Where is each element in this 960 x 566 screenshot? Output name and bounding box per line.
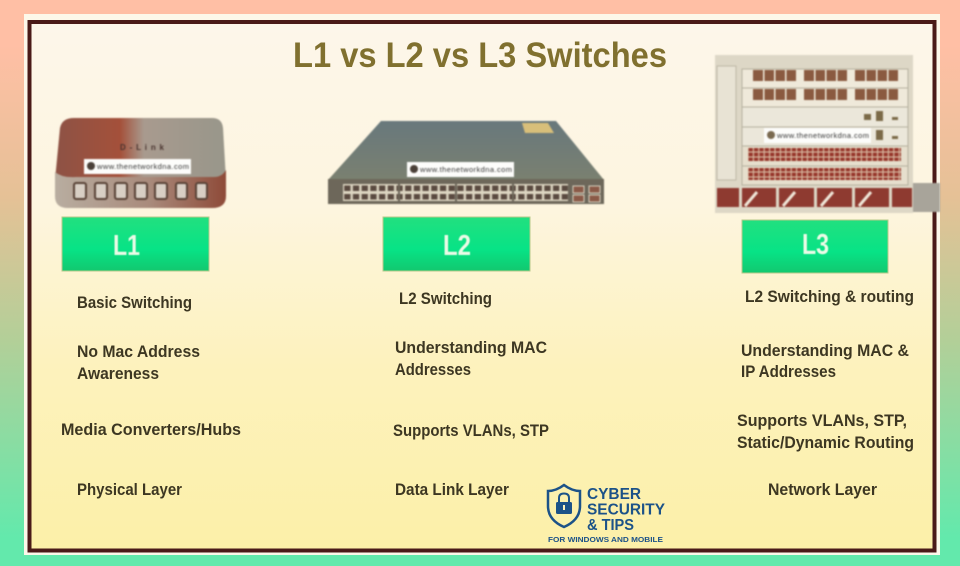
icon: L1 hub device: www.thenetworkdna.com xyxy=(96,162,189,171)
L2 label: L2 xyxy=(443,230,471,262)
L1 label: L1 xyxy=(113,230,140,262)
column: L3 features: Understanding MAC & xyxy=(741,342,909,360)
icon: L3 chassis device xyxy=(715,55,940,213)
column: L1 features xyxy=(61,294,241,499)
column: L3 features: L2 Switching & routing xyxy=(745,288,914,306)
column: L3 features: Static/Dynamic Routing xyxy=(737,434,914,452)
column: L3 features: Supports VLANs, STP, xyxy=(737,412,907,430)
column: L3 features: Network Layer xyxy=(768,481,878,499)
L1 label xyxy=(62,217,209,271)
column: L1 features: Basic Switching xyxy=(77,294,192,312)
column: L2 features: Data Link Layer xyxy=(395,481,510,499)
icon: L2 switch device xyxy=(328,121,604,204)
L3 label: L3 xyxy=(802,229,829,261)
logo: Cyber Security & Tips: CYBER xyxy=(587,486,641,503)
column: L3 features xyxy=(737,288,914,499)
column: L2 features: Understanding MAC xyxy=(395,339,547,357)
column: L2 features: Supports VLANs, STP xyxy=(393,422,549,440)
column: L1 features: Media Converters/Hubs xyxy=(61,421,241,439)
icon: L2 switch device: www.thenetworkdna.com xyxy=(419,165,512,174)
column: L1 features: Physical Layer xyxy=(77,481,183,499)
L3 label xyxy=(742,220,888,273)
L2 label xyxy=(383,217,530,271)
title: L1 vs L2 vs L3 Switches xyxy=(293,36,667,75)
column: L1 features: No Mac Address xyxy=(77,343,200,361)
column: L1 features: Awareness xyxy=(77,365,159,383)
column: L2 features: Addresses xyxy=(395,361,471,379)
icon: L1 hub device: D-Link xyxy=(120,143,165,152)
logo: Cyber Security & Tips xyxy=(548,485,666,544)
column: L2 features: L2 Switching xyxy=(399,290,492,308)
column: L3 features: IP Addresses xyxy=(741,363,836,381)
icon: L3 chassis device: www.thenetworkdna.com xyxy=(776,131,869,140)
icon: shield with lock xyxy=(548,485,580,527)
icon: L1 hub device xyxy=(55,118,226,208)
logo: Cyber Security & Tips: FOR WINDOWS AND MOBILE xyxy=(548,535,663,544)
logo: Cyber Security & Tips: & TIPS xyxy=(587,517,634,534)
logo: Cyber Security & Tips: SECURITY xyxy=(587,502,666,518)
column: L2 features xyxy=(393,290,549,499)
